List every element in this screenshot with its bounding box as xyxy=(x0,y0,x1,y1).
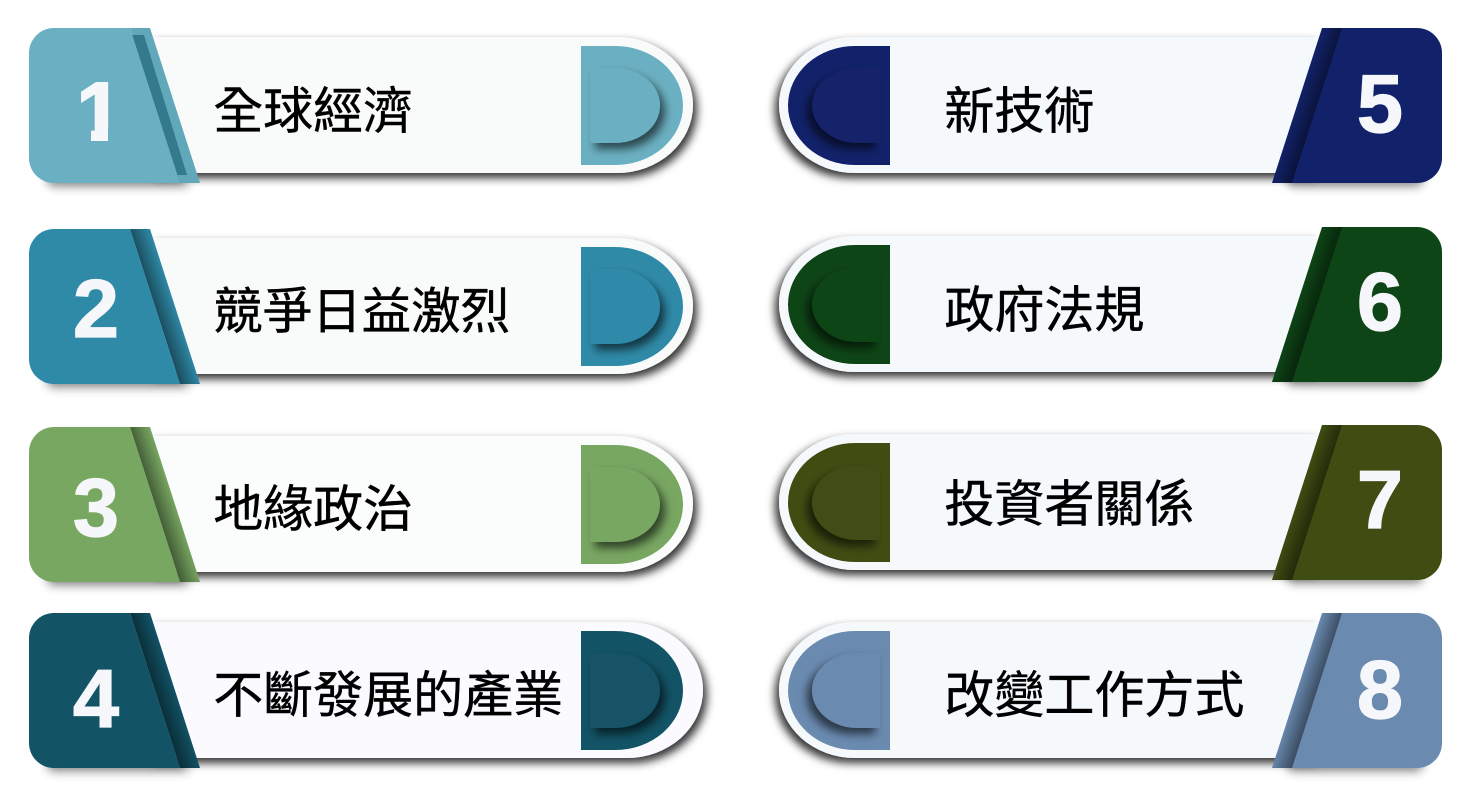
icon: half disc xyxy=(788,46,890,165)
tab xyxy=(1272,227,1442,382)
tab shadow xyxy=(1283,569,1425,583)
number 1: 1 xyxy=(76,65,123,158)
label: 改變工作方式 xyxy=(944,668,1244,724)
item 6: government regulation xyxy=(779,227,1442,385)
number 2: 2 xyxy=(73,262,119,355)
tab xyxy=(1272,613,1442,768)
pill xyxy=(150,37,693,173)
tab xyxy=(1272,28,1442,183)
item 3: geopolitics xyxy=(29,427,693,585)
icon: half disc xyxy=(581,247,683,366)
number 5: 5 xyxy=(1357,57,1403,150)
pill xyxy=(150,238,693,374)
icon: half disc xyxy=(788,245,890,364)
pill xyxy=(779,236,1320,372)
tab xyxy=(29,427,200,582)
label: 地緣政治 xyxy=(213,482,413,538)
icon: half disc xyxy=(788,443,890,562)
number 4: 4 xyxy=(73,652,119,745)
tab xyxy=(29,613,200,768)
item 4: evolving industries xyxy=(29,613,703,771)
tab shadow xyxy=(1283,371,1425,385)
item 7: investor relations xyxy=(779,425,1442,583)
pill xyxy=(150,436,693,572)
label: 投資者關係 xyxy=(944,476,1194,532)
tab shadow xyxy=(1283,757,1425,771)
label: 競爭日益激烈 xyxy=(213,284,510,340)
tab xyxy=(29,229,200,384)
tab shadow xyxy=(45,172,190,186)
label: 不斷發展的產業 xyxy=(213,668,563,724)
number 3: 3 xyxy=(73,461,119,554)
pill xyxy=(150,622,703,758)
tab xyxy=(1272,425,1442,580)
icon: half disc xyxy=(581,46,683,165)
tab xyxy=(29,28,200,183)
tab shadow xyxy=(45,571,190,585)
item 8: changing ways of working xyxy=(779,613,1442,771)
number 8: 8 xyxy=(1357,643,1403,736)
item 2: intensifying competition xyxy=(29,229,693,387)
label: 政府法規 xyxy=(944,282,1144,338)
tab shadow xyxy=(1283,172,1425,186)
item 1: global economy xyxy=(29,28,693,186)
number 7: 7 xyxy=(1357,453,1403,546)
icon: half disc xyxy=(788,631,890,750)
pill xyxy=(779,37,1320,173)
tab shadow xyxy=(45,757,190,771)
pill xyxy=(779,622,1320,758)
tab shadow xyxy=(45,373,190,387)
number 6: 6 xyxy=(1357,255,1403,348)
label: 全球經濟 xyxy=(213,84,413,140)
icon: half disc xyxy=(581,631,683,750)
label: 新技術 xyxy=(944,84,1094,140)
icon: half disc xyxy=(581,445,683,564)
item 5: new technology xyxy=(779,28,1442,186)
pill xyxy=(779,434,1320,570)
